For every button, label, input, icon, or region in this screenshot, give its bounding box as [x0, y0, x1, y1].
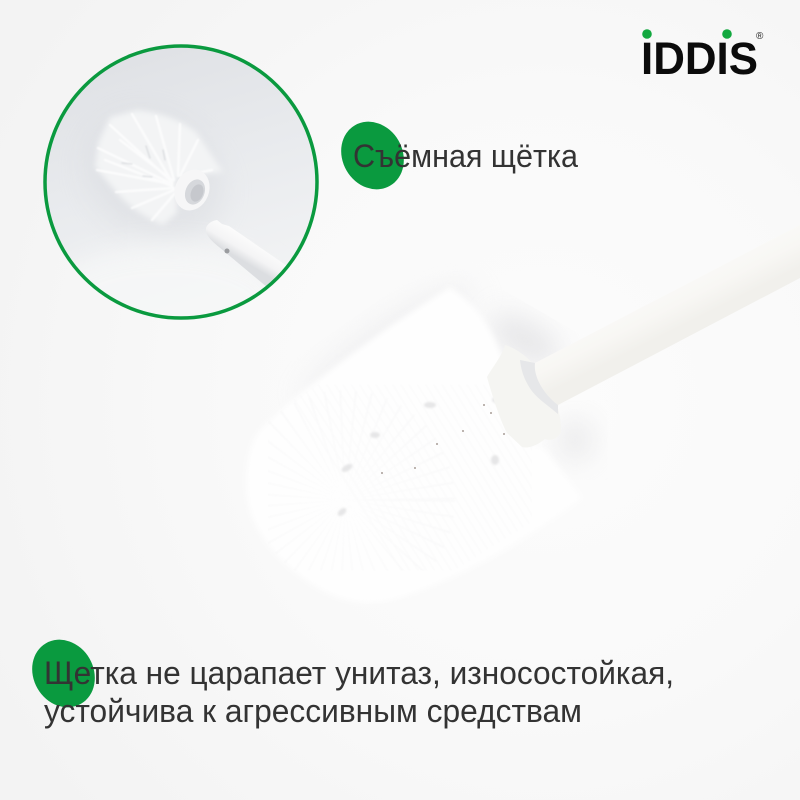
logo: IDDIS: IDDIS: [641, 33, 758, 84]
text block: removable brush: [329, 110, 578, 201]
text block: bristle benefits: Щетка не царапает унитаз, износостойкая,: [44, 655, 674, 691]
icon: green blob: [20, 628, 107, 719]
bristle texture: [290, 400, 510, 555]
panel: detail circle with removable brush: [45, 46, 317, 355]
handle end: [206, 220, 284, 286]
text block: bristle benefits: устойчива к агрессивным средствам: [44, 693, 582, 729]
shadow: [481, 304, 569, 376]
handle: [535, 225, 800, 405]
text block: removable brush: Съёмная щётка: [353, 138, 578, 174]
icon: green blob: [329, 110, 416, 201]
brush collar: [487, 345, 561, 448]
photo: detached brush head: [92, 111, 284, 286]
brush socket: [176, 174, 210, 210]
icon: logo green dots: [642, 29, 732, 39]
collar ring: [520, 360, 558, 414]
brush bristles: [246, 287, 582, 603]
text block: bristle benefits: [20, 628, 674, 729]
brush inner details: [336, 397, 502, 518]
main photo: brush: [338, 252, 800, 516]
registered mark: ®: [756, 31, 764, 42]
